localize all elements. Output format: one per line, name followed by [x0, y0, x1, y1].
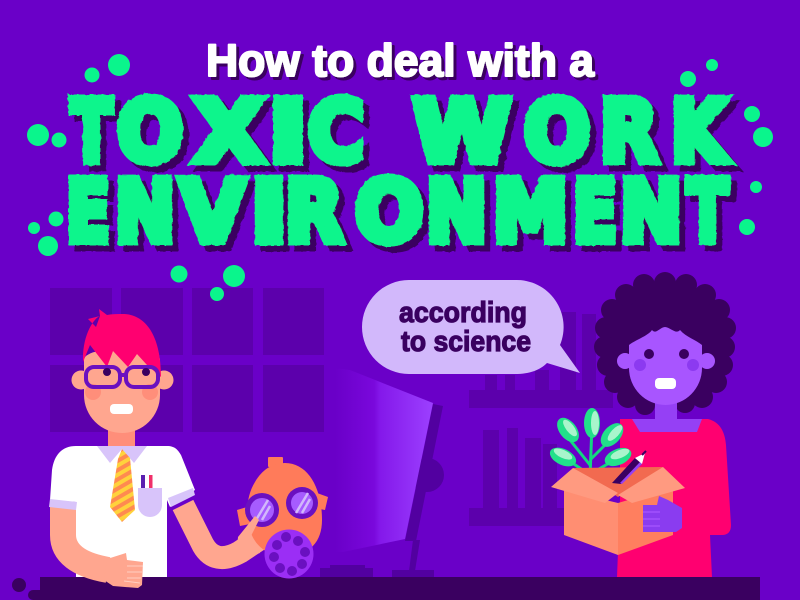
- plant: [547, 408, 634, 477]
- title: toxic work: X: [194, 83, 264, 182]
- man ears: [72, 370, 174, 390]
- plant stems: [568, 425, 618, 477]
- mask body: [247, 463, 322, 557]
- mask straps: [237, 457, 328, 526]
- mask left lens: [245, 493, 279, 527]
- man tie: [110, 449, 135, 522]
- man character: [49, 309, 258, 588]
- bubble text: to science: [401, 326, 531, 358]
- background bookshelves: [469, 312, 613, 526]
- title: environment: N: [620, 163, 682, 262]
- woman ears: [617, 353, 715, 369]
- title: toxic work: K: [671, 83, 729, 182]
- man sleeve cuffs: [49, 488, 195, 510]
- man pens: [141, 475, 152, 489]
- woman mouth: [655, 378, 676, 389]
- woman eyes: [644, 349, 689, 359]
- title: toxic work: C: [308, 83, 364, 182]
- gas mask: [236, 457, 328, 578]
- background windows: [50, 288, 324, 432]
- title: toxic work: R: [600, 83, 658, 182]
- bubble text: according: [399, 297, 527, 329]
- title: toxic work: O: [524, 83, 590, 182]
- pencil: [612, 451, 646, 484]
- man face: [84, 349, 160, 433]
- woman character: [594, 272, 736, 577]
- box left flap: [551, 468, 618, 503]
- keyboard: [320, 565, 373, 577]
- man collar: [97, 446, 147, 463]
- woman cheeks: [634, 359, 699, 371]
- man hair: [83, 309, 161, 377]
- woman face: [629, 327, 702, 405]
- woman dress: [617, 419, 731, 577]
- title: toxic work: [71, 83, 729, 182]
- man glasses: [86, 367, 158, 387]
- title: environment: [66, 163, 728, 262]
- title: environment: V: [180, 163, 245, 262]
- man neck: [108, 425, 135, 449]
- woman hair: [594, 272, 736, 415]
- box right face: [618, 487, 673, 555]
- desk: [12, 577, 760, 600]
- title: toxic work: W: [413, 83, 511, 182]
- title: environment: O: [355, 163, 423, 262]
- man eyes: [103, 368, 150, 376]
- box right flap: [618, 467, 685, 503]
- man shirt pocket: [138, 488, 162, 517]
- computer monitor: [335, 368, 444, 577]
- man shirt: [50, 446, 195, 577]
- man right arm: [183, 505, 258, 558]
- title: environment: E: [66, 163, 110, 262]
- title: environment: M: [493, 163, 568, 262]
- title: environment: N: [426, 163, 487, 262]
- cardboard box: [551, 451, 685, 555]
- speech bubble: [362, 280, 580, 374]
- woman neck: [655, 400, 677, 424]
- woman collar: [632, 419, 702, 432]
- title: toxic work: T: [71, 83, 112, 182]
- title: environment: N: [115, 163, 175, 262]
- bubble text: [399, 297, 531, 358]
- man mouth: [110, 404, 133, 414]
- title: how to deal with a: How to deal with a: [206, 35, 595, 86]
- box inside: [573, 467, 663, 497]
- mask filter: [264, 530, 314, 578]
- toxic green bubbles: [27, 54, 773, 301]
- title: environment: R: [285, 163, 343, 262]
- title: environment: E: [573, 163, 617, 262]
- title: toxic work: O: [117, 83, 183, 182]
- woman hand: [643, 496, 682, 532]
- man cheeks: [85, 384, 158, 400]
- man left arm: [63, 505, 108, 570]
- title: toxic work: I: [269, 83, 307, 182]
- box left face: [564, 490, 618, 555]
- title: environment: T: [687, 163, 728, 262]
- man hand: [104, 553, 143, 588]
- man hand on mask: [236, 516, 260, 560]
- mask right lens: [286, 487, 318, 519]
- plant leaves: [547, 408, 634, 470]
- title: environment: I: [251, 163, 287, 262]
